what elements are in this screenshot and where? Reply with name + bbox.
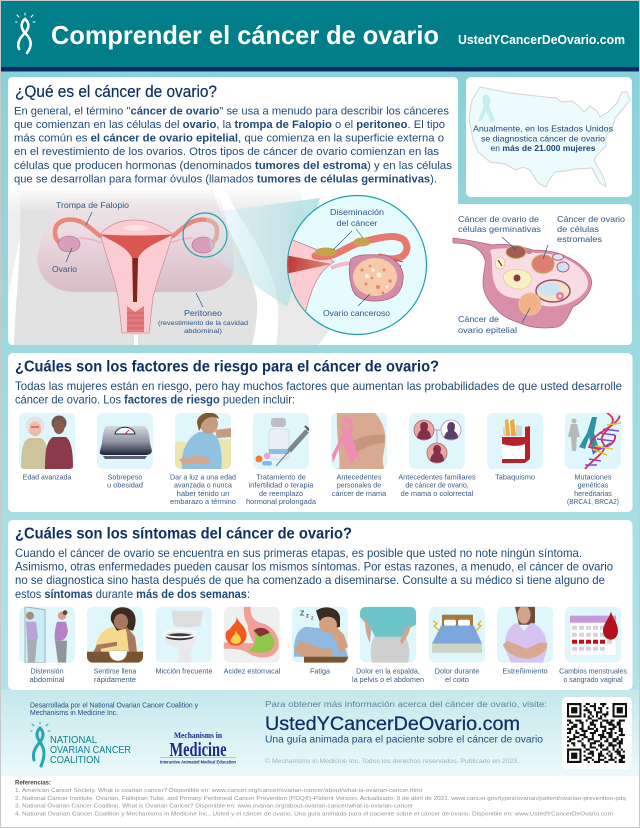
- header banner: [0, 1, 640, 72]
- guide description: Una guía animada para el paciente sobre el cáncer de ovario: [265, 734, 543, 746]
- illustration: body silhouette: [8, 186, 330, 345]
- website: UstedYCancerDeOvario.com: [265, 713, 520, 735]
- illustration: ovary cross-section: [453, 214, 625, 335]
- statistic text: se diagnostica cáncer de ovario: [481, 134, 605, 144]
- risk factor labels: embarazo a término: [170, 498, 236, 506]
- intro paragraph: [14, 106, 452, 186]
- symptom labels: Dolor en la espalda,: [356, 668, 420, 676]
- panel: risk factors: [8, 353, 632, 512]
- heading: ¿Cuáles son los síntomas del cáncer de ovario?: [15, 526, 352, 542]
- developed by credit: Desarrollada por el National Ovarian Cancer Coalition y: [30, 700, 198, 709]
- heading: ¿Cuáles son los factores de riesgo para el cáncer de ovario?: [15, 358, 439, 376]
- symptom labels: Fatiga: [310, 668, 330, 676]
- intro text: estos síntomas durante más de dos semanas:: [15, 587, 250, 601]
- logo: National Ovarian Cancer Coalition: OVARIAN CANCER: [50, 745, 131, 756]
- label: spread: del cáncer: [336, 218, 378, 228]
- logo: Mechanisms in Medicine: Medicine: [170, 739, 227, 761]
- icon: fatigue: [292, 607, 348, 663]
- map of United States: [469, 87, 630, 187]
- labels: ovarian cancer types: ovario epitelial: [458, 325, 517, 335]
- icon: fatigue: z: [306, 614, 309, 620]
- risk factor labels: (BRCA1, BRCA2): [567, 498, 619, 506]
- magnified circle: cancer spread: [280, 196, 426, 334]
- pelvis labels: (revestimiento de la cavidad: [158, 320, 248, 327]
- icon: constipation: [497, 606, 553, 663]
- symptom labels: Sentirse llena: [94, 668, 136, 676]
- symptom labels: [30, 668, 627, 684]
- risk factor labels: de mama o colorrectal: [401, 490, 474, 498]
- icon: scale: [97, 413, 153, 469]
- labels: ovarian cancer types: [458, 214, 625, 335]
- risk factor labels: Tratamiento de: [256, 474, 306, 482]
- references heading: Referencias:: [15, 780, 51, 786]
- icon: abdominal distension: [19, 607, 75, 663]
- copyright: © Mechanisms in Medicine Inc. Todos los derechos reservados. Publicado en 2023.: [265, 757, 519, 765]
- symptom labels: o sangrado vaginal: [563, 676, 623, 684]
- statistic text: [473, 124, 613, 153]
- symptom labels: la pelvis o el abdomen: [352, 676, 424, 684]
- risk factor labels: u obesidad: [107, 482, 143, 490]
- references list: 1. American Cancer Society. What is ovarian cancer? Disponible en: www.cancer.org/cancer/ovarian-cancer/about/what-is-ovarian-cancer.html: [15, 788, 422, 794]
- logo: National Ovarian Cancer Coalition: NATIONAL: [50, 735, 97, 746]
- risk factor labels: Dar a luz a una edad: [170, 474, 236, 482]
- risk factor labels: avanzada o nunca: [174, 482, 232, 490]
- heading: ¿Qué es el cáncer de ovario?: [15, 82, 217, 101]
- developed by credit: [30, 700, 198, 717]
- icon: bed: [429, 607, 485, 663]
- symptom labels: abdominal: [30, 676, 65, 684]
- icon: toilet: [156, 607, 212, 663]
- symptom labels: rápidamente: [94, 676, 136, 684]
- icon: dna and chromosome: [565, 413, 621, 469]
- risk factor labels: genéticas: [578, 482, 609, 490]
- illustration: pelvis and reproductive system: [37, 198, 234, 333]
- QR code: [562, 697, 632, 769]
- intro text: Cuando el cáncer de ovario se encuentra en sus primeras etapas, es posible que usted no note ningún síntoma.: [15, 546, 582, 560]
- icon: awareness ribbon: [478, 94, 495, 122]
- intro paragraph: en el revestimiento de los ovarios. Otros tipos de cáncer de ovario comienzan en las: [14, 146, 439, 158]
- icon: back and pelvis pain: [360, 607, 416, 663]
- statistic text: Anualmente, en los Estados Unidos: [473, 124, 613, 134]
- label: cancerous ovary: Ovario canceroso: [323, 308, 390, 318]
- icon: family history: [409, 413, 465, 469]
- risk factor labels: infertilidad o terapia: [249, 482, 313, 490]
- references list: 3. National Ovarian Cancer Coalition. What is Ovarian Cancer? Disponible en: www.ovarian.org/about-ovarian-cancer/what-is-ovarian-cancer: [15, 804, 413, 810]
- pelvis labels: [52, 200, 248, 335]
- intro paragraph: En general, el término "cáncer de ovario" se usa a menudo para describir los cánceres: [14, 106, 449, 118]
- risk factor labels: Antecedentes familiares: [398, 474, 476, 482]
- intro paragraph: que se desarrollan para formar óvulos (llamados tumores de células germinativas).: [14, 174, 437, 186]
- logo: National Ovarian Cancer Coalition: COALITION: [50, 755, 100, 766]
- pelvis labels: Trompa de Falopio: [56, 200, 129, 210]
- logo: Mechanisms in Medicine: Interactive Animated Medical Education: [160, 760, 236, 764]
- labels: ovarian cancer types: Cáncer de ovario de: [458, 214, 539, 224]
- risk factor labels: Antecedentes: [336, 474, 382, 482]
- icon: ribbon logo: [16, 13, 35, 53]
- intro text: no se diagnostica sino hasta después de que ha comenzado a diseminarse. Consulte a su médico si tiene alguno de: [15, 573, 605, 587]
- icon: fatigue: z: [311, 616, 314, 622]
- risk factor labels: hereditarias: [574, 490, 612, 498]
- label: spread: [330, 207, 384, 228]
- symptom labels: Dolor durante: [435, 668, 479, 676]
- pelvis labels: Ovario: [52, 264, 77, 274]
- labels: ovarian cancer types: Cáncer de ovario: [557, 214, 625, 224]
- icon: pregnant woman: [175, 413, 231, 469]
- references list: 2. National Cancer Institute. Ovarian, Fallopian Tube, and Primary Peritoneal Cancer Prevention (PDQ®)-Patient Version. Actualizado: 9 de abril de 2021. www.cancer.gov/types/ovarian/patient/ovarian-prevention-pdq: [15, 795, 626, 802]
- risk factor labels: de cáncer de ovario,: [405, 482, 469, 490]
- icon: hormone therapy vial and syringe: [253, 413, 311, 469]
- website link: UstedYCancerDeOvario.com: [458, 33, 625, 47]
- references list: 4. National Ovarian Cancer Coalition y Mechanisms in Medicine Inc., Usted y el cáncer de ovario. Una guía animada para el paciente sobre el cáncer de ovario. Disponible en: www.UstedYCancerDeOvario.com: [15, 812, 613, 818]
- risk factor labels: Sobrepeso: [108, 474, 142, 482]
- pelvis labels: abdominal): [184, 328, 222, 335]
- icon: older women: [19, 413, 75, 469]
- title: Comprender el cáncer de ovario: [51, 20, 439, 50]
- panel: symptoms: [8, 520, 632, 690]
- references: [0, 776, 640, 828]
- symptom labels: Estreñimiento: [502, 668, 548, 676]
- intro text: [15, 546, 613, 601]
- symptom labels: Acidez estomacal: [224, 668, 281, 676]
- icon: feeling full quickly: [87, 607, 143, 663]
- labels: ovarian cancer types: Cáncer de: [458, 314, 499, 324]
- intro text: [15, 379, 622, 406]
- icon: cigarette pack: [487, 413, 543, 469]
- intro text: Todas las mujeres están en riesgo, pero hay muchos factores que aumentan las probabilidades de que usted desarrolle: [15, 379, 622, 393]
- icon: heartburn stomach: [224, 607, 280, 663]
- risk factor labels: hormonal prolongada: [246, 498, 316, 506]
- icon: fatigue: Z: [300, 611, 305, 618]
- intro text: Asimismo, otras enfermedades pueden causar los mismos síntomas. Por estas razones, a menudo, el cáncer de ovario: [15, 560, 613, 574]
- risk factor labels: Tabaquismo: [495, 474, 535, 482]
- risk factor labels: [23, 474, 619, 506]
- logo: Mechanisms in Medicine: [160, 731, 236, 764]
- footer band: [0, 690, 640, 776]
- intro paragraph: células que producen hormonas (denominados tumores del estroma) y en las células: [14, 160, 452, 172]
- statistic text: en más de 21.000 mujeres: [490, 143, 596, 153]
- panel: annual statistic with US map: [466, 77, 632, 197]
- icon: breast cancer ribbon: [331, 413, 387, 469]
- label: spread: Diseminación: [330, 207, 384, 217]
- risk factor labels: haber tenido un: [177, 490, 229, 498]
- labels: ovarian cancer types: estromales: [557, 234, 602, 244]
- symptom labels: Micción frecuente: [156, 668, 213, 676]
- symptom labels: Cambios menstruales: [559, 668, 627, 676]
- symptom labels: el coito: [445, 676, 469, 684]
- intro text: cáncer de ovario. Los factores de riesgo pueden incluir:: [15, 392, 295, 406]
- developed by credit: Mechanisms in Medicine Inc.: [30, 708, 118, 717]
- icon: menstrual changes calendar: [565, 607, 621, 663]
- magnified view beam: [205, 198, 320, 307]
- logo: National Ovarian Cancer Coalition: [30, 722, 131, 766]
- references list: [15, 788, 626, 818]
- labels: ovarian cancer types: células germinativas: [458, 224, 541, 234]
- risk factor labels: personales de: [337, 482, 381, 490]
- pelvis labels: Peritoneo: [184, 308, 222, 318]
- intro paragraph: más común es el cáncer de ovario epitelial, que comienza en la superficie externa o: [14, 132, 444, 144]
- risk factor labels: Edad avanzada: [23, 474, 71, 482]
- small callout circle: [183, 213, 227, 257]
- intro paragraph: que comienzan en las células del ovario, la trompa de Falopio o el peritoneo. El tipo: [14, 119, 445, 131]
- more information prompt: Para obtener más información acerca del cáncer de ovario, visite:: [265, 699, 547, 709]
- risk factor labels: cáncer de mama: [332, 490, 386, 498]
- logo: Mechanisms in Medicine: Mechanisms in: [174, 731, 223, 740]
- symptom labels: Distensión: [30, 668, 64, 676]
- labels: ovarian cancer types: de células: [557, 224, 599, 234]
- risk factor labels: Mutaciones: [574, 474, 612, 482]
- risk factor labels: de reemplazo: [259, 490, 303, 498]
